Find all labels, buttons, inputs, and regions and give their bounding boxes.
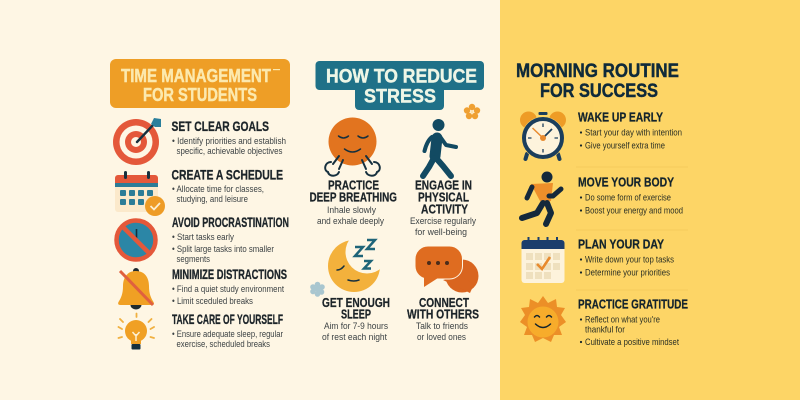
heading: morning routine for success: MORNING ROUTINE <box>516 61 679 82</box>
icon: sleeping moon <box>328 230 388 292</box>
icon: target <box>113 118 161 165</box>
icon: smiling sun <box>520 296 566 342</box>
text: connect with others: CONNECT <box>419 296 469 310</box>
text: take care of yourself: TAKE CARE OF YOURSELF <box>172 312 283 327</box>
text: wake up early: WAKE UP EARLY <box>578 111 664 125</box>
text: minimize distractions: • Find a quiet study environment <box>172 284 284 294</box>
text: minimize distractions <box>172 267 287 306</box>
text: practice deep breathing: PRACTICE <box>328 178 379 192</box>
text: wake up early <box>578 111 682 151</box>
text: wake up early: Start your day with intention <box>585 128 682 138</box>
heading: how to reduce stress: HOW TO REDUCE <box>326 66 477 88</box>
text: engage in physical activity: PHYSICAL <box>418 190 469 204</box>
text: connect with others: WITH OTHERS <box>407 308 479 322</box>
text: practice gratitude: thankful for <box>585 324 625 334</box>
text: practice gratitude <box>578 298 688 347</box>
text: move your body <box>578 176 683 216</box>
text: practice gratitude: PRACTICE GRATITUDE <box>578 298 688 312</box>
text: avoid procrastination: AVOID PROCRASTINATION <box>172 215 289 230</box>
text: practice gratitude: Reflect on what you're <box>585 315 660 325</box>
text: practice gratitude: Cultivate a positive mindset <box>585 337 679 347</box>
text: avoid procrastination <box>172 215 289 264</box>
text: engage in physical activity: for well-being <box>415 227 467 237</box>
text: set clear goals: specific, achievable objectives <box>176 146 283 156</box>
text: wake up early: Give yourself extra time <box>585 141 665 151</box>
text: get enough sleep: SLEEP <box>341 308 371 322</box>
icon: orange flower <box>464 104 480 119</box>
icon: pale blue flower <box>310 282 325 297</box>
text: plan your day: Determine your priorities <box>585 268 671 278</box>
text: minimize distractions: MINIMIZE DISTRACTIONS <box>172 267 287 282</box>
text: engage in physical activity: ACTIVITY <box>421 202 469 216</box>
heading: morning routine for success: FOR SUCCESS <box>540 81 658 102</box>
text: practice deep breathing: DEEP BREATHING <box>310 190 397 204</box>
text: get enough sleep: Aim for 7-9 hours <box>324 321 389 331</box>
icon: calendar with check <box>115 171 165 216</box>
panel: how to reduce stress <box>310 61 484 342</box>
heading: how to reduce stress: STRESS <box>364 86 436 108</box>
text: avoid procrastination: segments <box>176 254 211 264</box>
text: engage in physical activity <box>410 178 477 237</box>
icon: planning calendar <box>522 237 564 283</box>
text: take care of yourself: • Ensure adequate sleep, regular <box>172 329 283 339</box>
text: take care of yourself: exercise, scheduled breaks <box>176 339 271 349</box>
text: create a schedule: CREATE A SCHEDULE <box>172 168 283 182</box>
text: connect with others <box>407 296 479 342</box>
text: get enough sleep: of rest each night <box>322 332 388 342</box>
heading: morning routine for success <box>516 61 679 102</box>
text: minimize distractions: • Limit sceduled breaks <box>172 296 254 306</box>
text: plan your day <box>578 237 675 278</box>
text: set clear goals <box>172 119 286 156</box>
text: take care of yourself <box>172 312 283 349</box>
icon: no clock <box>116 220 156 260</box>
text: create a schedule: • Allocate time for classes, <box>172 184 264 194</box>
text: move your body: Do some form of exercise <box>585 193 671 203</box>
text: practice deep breathing: Inhale slowly <box>327 205 377 215</box>
icon: light bulb <box>118 314 154 350</box>
icon: chat bubbles <box>415 246 478 293</box>
heading: time management: TIME MANAGEMENT <box>121 65 272 86</box>
text: create a schedule: studying, and leisure <box>176 194 248 204</box>
text: connect with others: Talk to friends <box>416 321 469 331</box>
heading: time management <box>110 59 290 108</box>
text: practice deep breathing <box>310 178 397 226</box>
icon: breathing face <box>325 118 380 176</box>
text: plan your day: PLAN YOUR DAY <box>578 237 665 251</box>
heading: time management: FOR STUDENTS <box>143 84 257 105</box>
text: engage in physical activity: ENGAGE IN <box>415 178 472 192</box>
text: get enough sleep <box>322 296 390 342</box>
text: connect with others: or loved ones <box>417 332 467 342</box>
text: set clear goals: SET CLEAR GOALS <box>172 119 269 134</box>
text: practice deep breathing: and exhale deeply <box>317 216 385 226</box>
text: move your body: Boost your energy and mood <box>585 206 683 216</box>
icon: running person <box>522 172 561 224</box>
panel: time management <box>110 59 290 350</box>
icon: walking person <box>423 119 456 176</box>
text: engage in physical activity: Exercise regularly <box>410 216 477 226</box>
text: create a schedule <box>172 168 283 204</box>
text: move your body: MOVE YOUR BODY <box>578 176 675 190</box>
text: avoid procrastination: • Start tasks early <box>172 232 235 242</box>
icon: muted bell <box>118 268 154 310</box>
text: set clear goals: • Identify priorities and establish <box>172 136 286 146</box>
icon: alarm clock <box>520 112 566 160</box>
heading: how to reduce stress <box>316 61 484 110</box>
text: plan your day: Write down your top tasks <box>585 255 675 265</box>
text: avoid procrastination: • Split large tasks into smaller <box>172 244 274 254</box>
text: get enough sleep: GET ENOUGH <box>322 296 390 310</box>
panel: morning routine <box>516 61 688 347</box>
